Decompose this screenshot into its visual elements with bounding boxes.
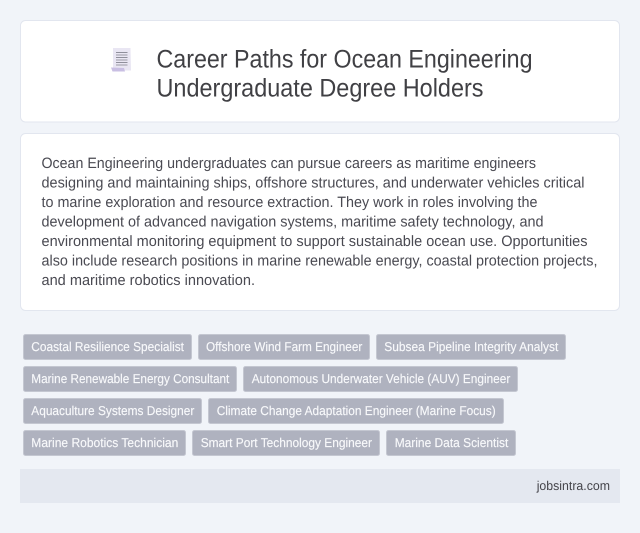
text block: description: to marine exploration and resource extraction. They work in roles involving the — [42, 194, 538, 211]
tag: Aquaculture Systems Designer — [31, 403, 195, 418]
tag — [208, 398, 504, 424]
title: Undergraduate Degree Holders — [156, 74, 484, 102]
footer — [20, 469, 620, 503]
tag: Autonomous Underwater Vehicle (AUV) Engineer — [252, 371, 511, 386]
title: Career Paths for Ocean Engineering — [156, 46, 532, 74]
tag: Coastal Resilience Specialist — [31, 339, 184, 354]
tag list — [24, 334, 566, 456]
tag: Offshore Wind Farm Engineer — [206, 339, 363, 354]
tag: Subsea Pipeline Integrity Analyst — [384, 339, 559, 354]
tag — [24, 398, 202, 424]
tag: Marine Data Scientist — [395, 435, 509, 450]
text block: description: development of advanced navigation systems, maritime safety technology, and — [42, 214, 544, 230]
text block: description: also include research positions in marine renewable energy, coastal protection projects, — [42, 252, 598, 270]
panel: header — [20, 20, 620, 122]
tag — [24, 366, 236, 392]
text block: description — [42, 155, 598, 289]
tag — [244, 366, 518, 392]
footer source text: jobsintra.com — [536, 478, 610, 493]
tag: Marine Renewable Energy Consultant — [31, 371, 230, 386]
tag — [386, 430, 516, 456]
text block: description: Ocean Engineering undergraduates can pursue careers as maritime engineers — [42, 155, 536, 172]
tag: Smart Port Technology Engineer — [201, 435, 373, 450]
tag — [24, 334, 192, 360]
icon: document — [111, 48, 131, 72]
panel: description — [20, 134, 620, 310]
tag: Climate Change Adaptation Engineer (Marine Focus) — [217, 403, 496, 418]
text block: description: and maritime robotics innovation. — [42, 272, 255, 289]
title — [156, 46, 532, 102]
tag — [192, 430, 380, 456]
text block: description: designing and maintaining ships, offshore structures, and underwater vehicles critical — [42, 174, 584, 192]
tag — [198, 334, 370, 360]
tag: Marine Robotics Technician — [31, 435, 178, 450]
tag — [24, 430, 186, 456]
text block: description: environmental monitoring equipment to support sustainable ocean use. Opportunities — [42, 233, 588, 250]
tag — [376, 334, 566, 360]
